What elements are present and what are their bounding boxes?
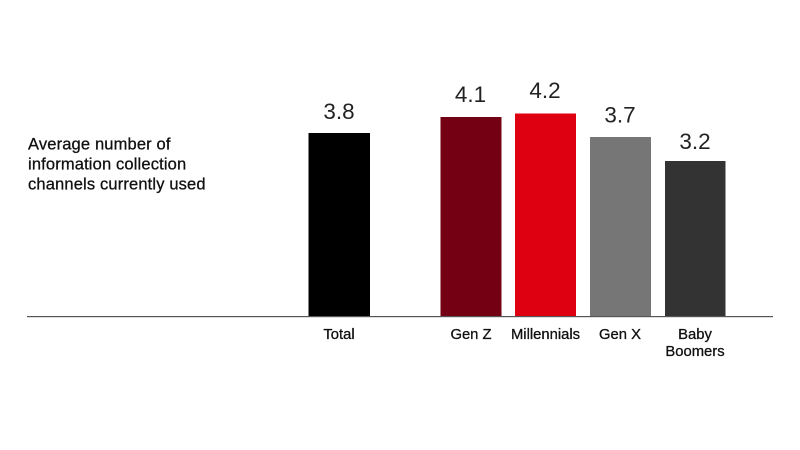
chart description text: Average number of bbox=[28, 136, 171, 154]
bar: Total: 3.8 bbox=[323, 99, 355, 124]
bar: Total bbox=[308, 99, 370, 343]
bar: Baby Boomers: Boomers bbox=[665, 344, 725, 360]
bar: Baby Boomers: 3.2 bbox=[679, 129, 711, 154]
bar: Gen X: 3.7 bbox=[604, 102, 636, 128]
chart description text bbox=[28, 136, 206, 194]
bar: Millennials: 4.2 bbox=[529, 78, 561, 103]
bar: Total: Total bbox=[323, 327, 355, 343]
bar: Gen Z bbox=[440, 82, 502, 343]
bar: Baby Boomers bbox=[665, 129, 726, 360]
bar: Gen Z: Gen Z bbox=[450, 327, 492, 343]
bar: Baby Boomers: Baby bbox=[678, 327, 712, 343]
baseline axis bbox=[27, 316, 773, 317]
bar: Gen X bbox=[590, 102, 651, 343]
chart description text: channels currently used bbox=[28, 176, 206, 194]
chart description text: information collection bbox=[28, 156, 186, 174]
bar: Gen Z: 4.1 bbox=[455, 82, 486, 107]
bar: Millennials: Millennials bbox=[511, 327, 580, 343]
bar: Millennials bbox=[511, 78, 580, 343]
bar: Gen X: Gen X bbox=[599, 327, 641, 343]
